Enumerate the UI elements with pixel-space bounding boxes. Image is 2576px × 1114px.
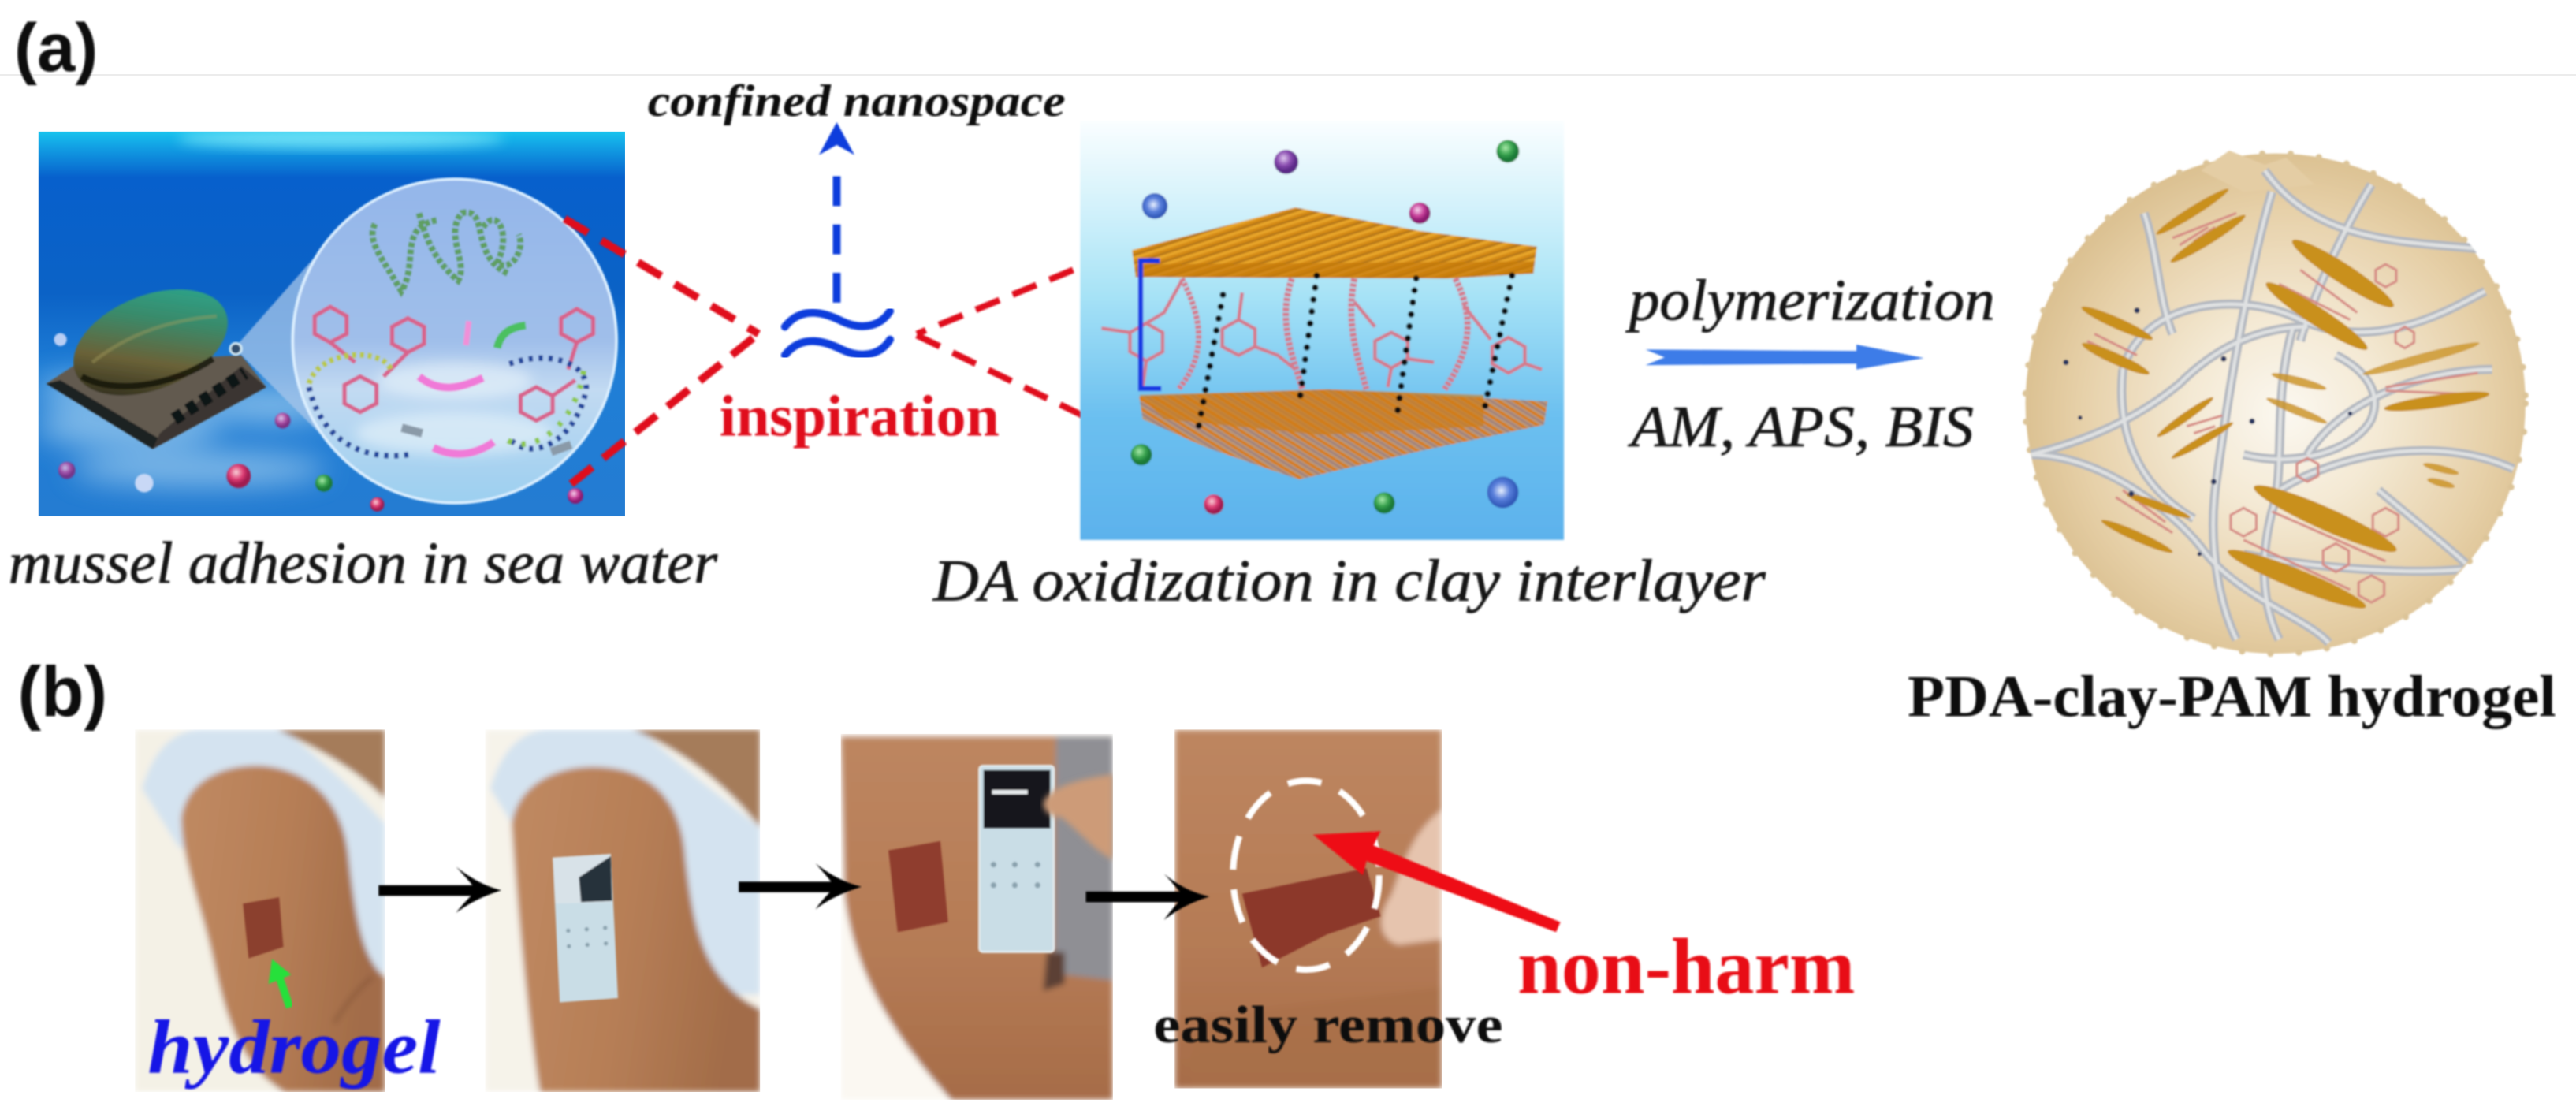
caption: mussel adhesion in sea water: mussel adhesion in sea water	[9, 531, 718, 596]
label: polymerization: polymerization	[1625, 267, 1995, 332]
icon: approximately-equal symbol	[785, 311, 890, 356]
mussel foot protein chains	[373, 212, 520, 291]
arrow: red non-harm pointer	[1313, 831, 1561, 932]
panel label: (b): (b)	[18, 652, 107, 732]
photo: hydrogel with device removed	[841, 734, 1113, 1100]
ions in sea water	[54, 333, 583, 512]
connector: red dashed lines from mussel panel	[564, 219, 758, 487]
hydrogel patch	[243, 897, 284, 959]
caption: DA oxidization in clay interlayer: DA oxidization in clay interlayer	[932, 548, 1766, 613]
dopamine fragments	[2087, 213, 2478, 602]
label: non-harm: non-harm	[1517, 922, 1855, 1011]
caption: PDA-clay-PAM hydrogel: PDA-clay-PAM hydrogel	[1908, 664, 2556, 729]
label: easily remove: easily remove	[1153, 997, 1503, 1054]
clay platelets	[2079, 185, 2490, 617]
icon: magnifier lens	[230, 179, 616, 503]
hydrogel patch	[888, 841, 948, 932]
hydrogel being peeled	[1242, 868, 1381, 967]
panel: DA oxidization in clay interlayer illustration	[1080, 121, 1564, 540]
arrow: step 2 to 3	[739, 863, 862, 909]
photo: hydrogel on arm	[135, 729, 385, 1092]
polymer network	[2031, 170, 2514, 643]
icon: white dashed circle	[1233, 781, 1379, 970]
panel label: (a): (a)	[14, 10, 98, 86]
arrow: blue dashed upward	[819, 122, 854, 303]
label: hydrogel: hydrogel	[147, 1005, 441, 1090]
dopamine strands	[1101, 278, 1542, 389]
wearable device	[553, 854, 618, 1002]
hydrogen bond rings	[309, 355, 586, 456]
arrow: step 1 to 2	[378, 866, 501, 913]
label: AM, APS, BIS: AM, APS, BIS	[1627, 394, 1974, 459]
illustration: PDA-clay-PAM hydrogel sphere	[2026, 151, 2526, 654]
fingers holding device	[1044, 774, 1113, 859]
bracket: interlayer spacing	[1141, 261, 1161, 389]
ions in water	[1130, 140, 1519, 514]
connector: red dashed lines to clay panel	[917, 270, 1087, 418]
arrow: step 3 to 4	[1086, 874, 1209, 920]
panel: mussel adhesion in sea water illustration	[35, 129, 625, 516]
clay sheet: lower	[1139, 389, 1547, 479]
label: confined nanospace: confined nanospace	[648, 76, 1066, 126]
arrow: polymerization blue arrow	[1645, 345, 1924, 370]
icon: mussel on plate	[47, 269, 266, 449]
arrow: green pointer to hydrogel	[269, 959, 291, 1008]
dotted hydrogen bonds	[1198, 276, 1512, 430]
wearable device	[979, 766, 1054, 952]
photo: easily removing hydrogel	[1174, 729, 1442, 1088]
clay sheet: upper	[1132, 207, 1537, 278]
photo: electronic device on hydrogel	[485, 729, 760, 1092]
label: inspiration: inspiration	[720, 383, 1000, 448]
